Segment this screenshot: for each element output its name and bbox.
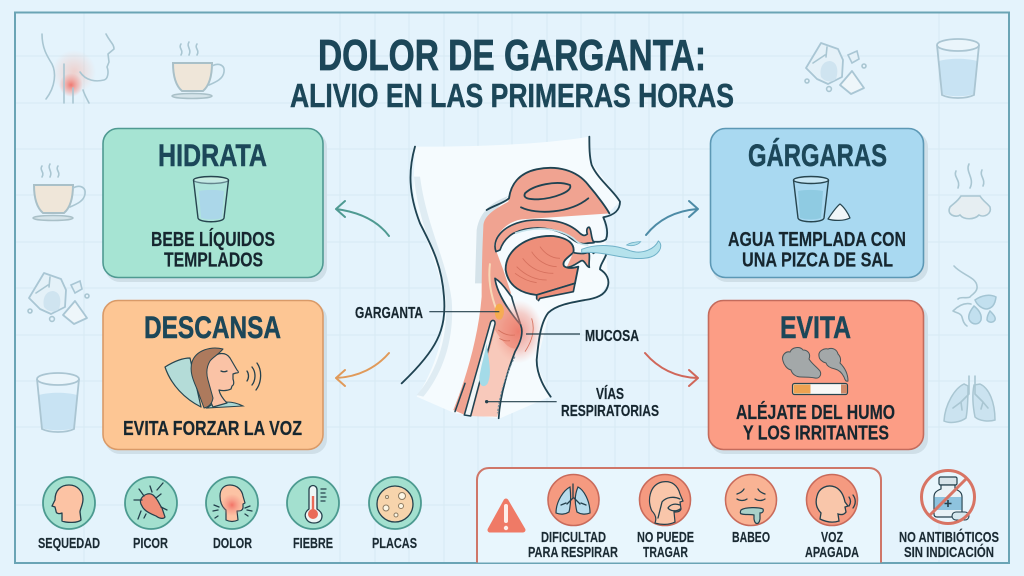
leader line: garganta [429,310,499,313]
text: evita: Y LOS IRRITANTES [743,422,889,444]
decorative icon: runny nose [953,266,996,326]
symptom: sequedad: SEQUEDAD [38,535,100,552]
decorative icon: nose with vapours [949,164,990,219]
stream on palate [515,229,588,245]
leader line: vias respiratorias [485,400,488,403]
heading: gargaras: GÁRGARAS [748,137,887,173]
sign: dificultad para respirar [528,474,618,561]
decorative icon: neck with red spot [42,34,114,103]
arrow: to gargaras [646,201,698,235]
water stream [582,241,661,259]
symptom: picor: PICOR [133,535,168,552]
label: vias respiratorias: RESPIRATORIAS [561,403,659,420]
symptom: sequedad [38,477,100,552]
white airway above palate [494,217,603,252]
icon: smoke and cigarette [783,348,848,394]
text: hidrata: TEMPLADOS [164,248,263,272]
text: evita: ALÉJATE DEL HUMO [736,401,895,424]
symptom: fiebre [287,477,339,552]
decorative icon: glass top [937,39,979,98]
symptom: picor [125,477,177,552]
icon: crossed-out medicine bottle [921,470,975,524]
inflammation glow [493,300,543,363]
text: hidrata [151,228,275,272]
sign: voz apagada [805,474,859,561]
icon: warning triangle [490,501,523,530]
heading: descansa: DESCANSA [144,309,281,345]
panel: evita [708,300,928,454]
left wall bottom [455,383,465,412]
lower airway lighter area [472,330,517,417]
sign: babeo [726,474,776,546]
text: gargaras: UNA PIZCA DE SAL [742,248,893,272]
right airway wall [499,325,522,418]
nasal turbinates [521,183,588,212]
sign: dificultad para respirar: PARA RESPIRAR [528,544,618,561]
label: garganta: GARGANTA [355,305,423,322]
symptom: fiebre: FIEBRE [293,535,333,552]
leader line: vias line [487,400,557,403]
text: descansa: EVITA FORZAR LA VOZ [123,417,302,440]
throat white epiglottis [510,293,548,363]
arrow: to hidrata [336,201,389,236]
panel: warning signs [477,468,881,562]
symptom: placas [369,477,421,552]
heading: evita: EVITA [780,309,851,345]
sign: voz apagada: VOZ [821,529,843,546]
notice: no antibiotics [899,470,999,561]
tongue fibres [515,247,560,283]
chart: throat anatomy diagram [402,137,661,418]
face front line [537,137,620,397]
icon: glass with salt [794,176,850,222]
label: vias respiratorias [561,384,659,420]
sign: no puede tragar [637,474,694,561]
neck back line [402,147,444,383]
icon: resting person [165,348,261,408]
sign: no puede tragar: TRAGAR [643,544,688,561]
symptom: placas: PLACAS [372,535,417,552]
icon: glass of water [194,176,228,222]
text: hidrata: BEBE LÍQUIDOS [151,228,275,251]
sign: dificultad para respirar: DIFICULTAD [541,529,606,546]
orange spot [495,304,504,320]
symptom: dolor: DOLOR [213,535,252,552]
decorative icon: ice left [28,273,89,324]
lower tooth [567,252,589,267]
panel: hidrata [103,128,327,282]
mouth floor tissue [537,283,575,303]
decorative icon: cup left [33,164,85,220]
symptom: dolor [206,477,258,552]
white oesophagus strip [464,320,495,416]
decorative icon: ice top [805,43,866,94]
sign: babeo: BABEO [732,529,770,546]
notice: no antibiotics: SIN INDICACIÓN [904,543,994,561]
soft palate band [495,220,594,252]
text: evita [736,401,895,444]
main pink tissue [453,168,610,417]
sign: voz apagada: APAGADA [805,544,859,561]
title: ALIVIO EN LAS PRIMERAS HORAS [290,77,734,114]
blue fluid [479,343,490,386]
decorative icon: glass left [37,373,79,432]
label: vias respiratorias: VÍAS [596,384,624,403]
panel: gargaras [710,128,928,282]
arrow: to evita [645,353,698,386]
text: gargaras [728,228,906,272]
decorative icon: cup top [172,42,224,98]
label: mucosa: MUCOSA [585,328,639,345]
title: DOLOR DE GARGANTA: [318,32,706,80]
shadow beside neck [414,177,452,397]
tongue [506,236,578,295]
nasal outline [487,168,609,213]
arrow: to descansa [336,353,389,386]
title [290,32,734,114]
decorative icon: lungs [944,376,995,422]
mucosa fibres [498,318,533,352]
panel: descansa [103,300,327,454]
heading: hidrata: HIDRATA [158,137,267,173]
text: gargaras: AGUA TEMPLADA CON [728,228,906,251]
sign: no puede tragar: NO PUEDE [637,529,694,546]
leader line: mucosa [526,332,580,336]
head silhouette [413,137,620,418]
